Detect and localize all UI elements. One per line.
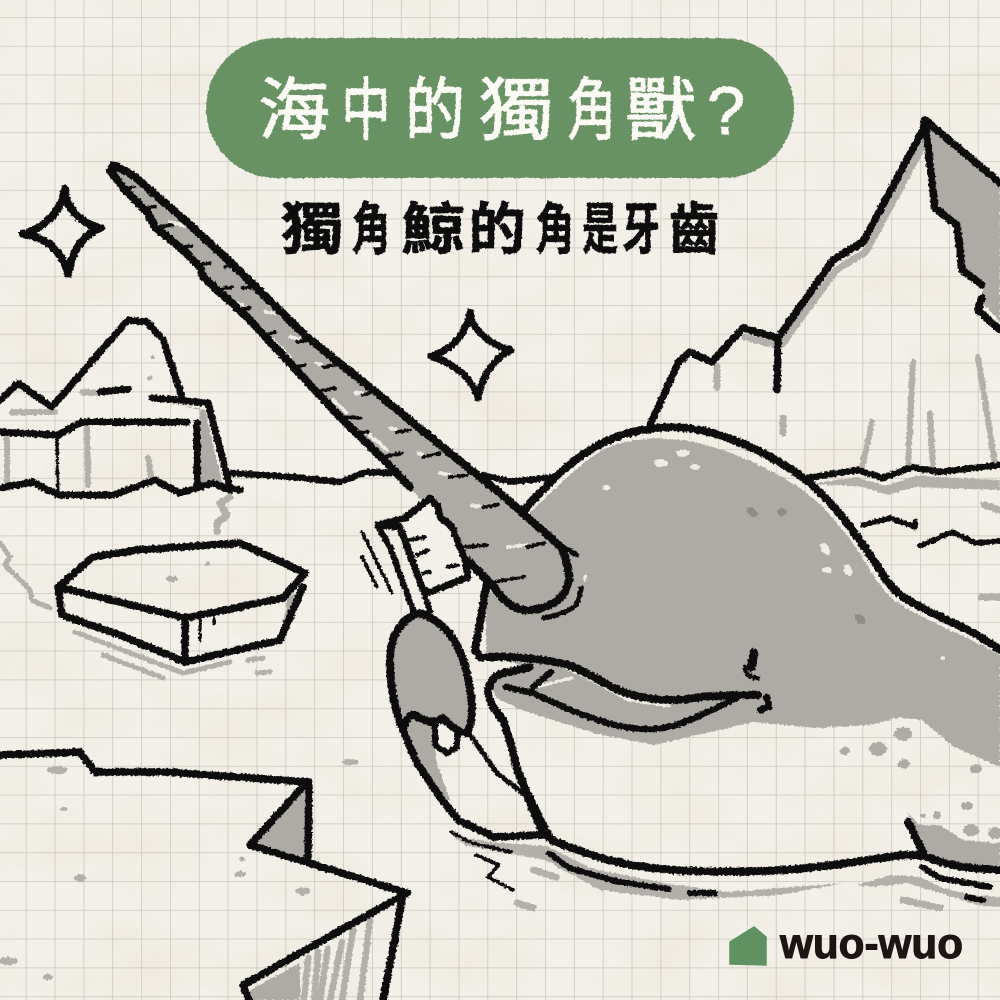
shadow blobs bbox=[517, 870, 940, 908]
waterline strokes bbox=[549, 853, 990, 900]
floe side shade bbox=[283, 590, 302, 623]
icon: green house bbox=[730, 927, 766, 965]
iceberg outline bbox=[648, 120, 1000, 430]
belly speckles bbox=[840, 727, 1000, 839]
logo bbox=[730, 920, 963, 968]
outline bbox=[0, 320, 240, 495]
big iceberg right bbox=[648, 120, 1000, 467]
title pill bbox=[206, 38, 794, 178]
lip highlight bbox=[536, 664, 669, 706]
small iceberg left bbox=[0, 320, 240, 495]
subtitle: 齒 bbox=[669, 200, 719, 262]
horn socket bbox=[544, 545, 581, 618]
waves right bbox=[863, 518, 1000, 546]
shelf triangle shade bbox=[250, 785, 306, 858]
iceberg shaded face bbox=[925, 120, 1000, 322]
darker spots bbox=[745, 505, 867, 626]
hand fill and outline bbox=[390, 613, 472, 733]
floe outline bbox=[58, 543, 305, 662]
brand name: wuo-wuo bbox=[779, 920, 963, 968]
eye lid bbox=[745, 667, 758, 678]
subtitle: 牙 bbox=[622, 200, 660, 262]
subtitle bbox=[281, 198, 719, 262]
title text: 的 bbox=[405, 72, 465, 149]
horizon line bbox=[228, 465, 1000, 482]
horn fill bbox=[113, 165, 569, 610]
foreground ice shelf bbox=[0, 752, 407, 1000]
shelf streaks bbox=[304, 920, 370, 1000]
narwhal bbox=[110, 165, 1000, 908]
subtitle: 鯨 bbox=[402, 198, 464, 261]
motion lines bbox=[362, 532, 392, 593]
shelf outline bbox=[0, 752, 407, 1000]
arm fill bbox=[403, 715, 450, 800]
eye bbox=[751, 653, 754, 667]
scattered gray dots bbox=[0, 355, 784, 980]
icon: sparkle left bbox=[23, 189, 101, 274]
horn ticks bbox=[123, 187, 544, 582]
ice floe bbox=[58, 543, 305, 678]
horizon water shadow bbox=[808, 476, 1000, 495]
arm outline bbox=[403, 730, 544, 837]
shelf corner shade bbox=[250, 963, 300, 1000]
title text: 角 bbox=[568, 72, 616, 149]
tail fluke fill bbox=[908, 813, 1000, 867]
horn outline bbox=[110, 165, 569, 610]
subtitle: 的 bbox=[468, 199, 526, 261]
whale shadow on water bbox=[451, 835, 1000, 907]
toothbrush bbox=[362, 498, 468, 612]
whale outline bbox=[475, 427, 1000, 872]
title text bbox=[258, 72, 745, 149]
title text: ? bbox=[707, 73, 745, 149]
shaded face bbox=[170, 403, 222, 483]
horn bbox=[110, 165, 581, 618]
brush head bbox=[378, 498, 468, 592]
whale body fill bbox=[486, 439, 1000, 767]
gray streaks bbox=[7, 392, 151, 485]
horn highlights bbox=[150, 190, 527, 547]
water ripples bbox=[0, 497, 1000, 608]
title text: 中 bbox=[342, 72, 390, 149]
title text: 獸 bbox=[625, 73, 697, 149]
title text: 獨 bbox=[479, 73, 553, 149]
iceberg soft shadows bbox=[717, 142, 995, 467]
subtitle: 獨 bbox=[281, 198, 343, 261]
title text: 海 bbox=[258, 73, 330, 149]
bristles bbox=[410, 537, 458, 573]
mouth lower lip bbox=[506, 672, 769, 729]
subtitle: 角 bbox=[352, 200, 390, 262]
brush handle bbox=[378, 527, 430, 612]
spots on body bbox=[583, 450, 946, 660]
flipper holding brush bbox=[390, 613, 544, 837]
floe shadows bbox=[75, 632, 270, 678]
icon: sparkle center bbox=[431, 312, 511, 398]
subtitle: 角 bbox=[536, 200, 574, 262]
subtitle: 是 bbox=[582, 199, 618, 262]
thumb bbox=[435, 723, 457, 753]
